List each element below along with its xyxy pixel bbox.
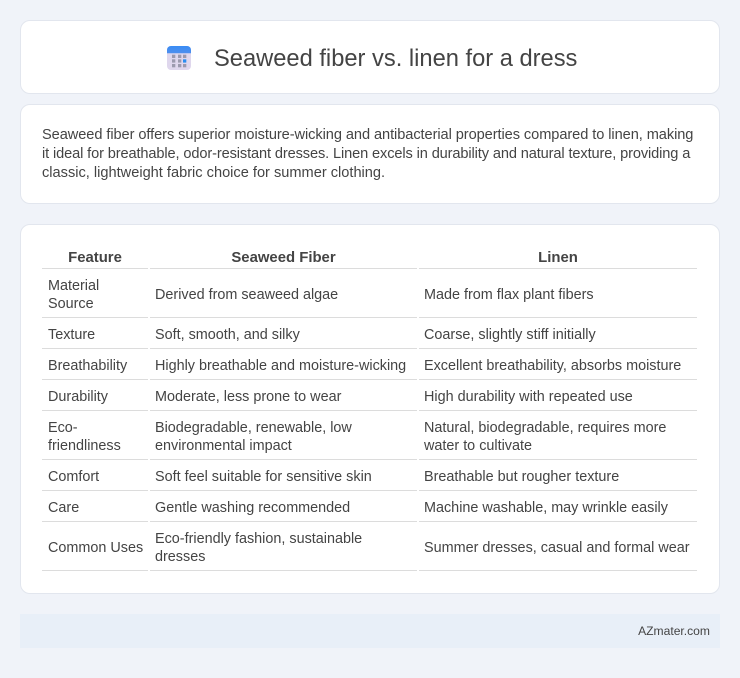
- row: eco-friendliness: environmental impact: [155, 438, 292, 454]
- header card: [20, 20, 720, 94]
- row: common uses: dresses: [155, 549, 205, 565]
- row: breathability: Highly breathable and moisture-wicking: [155, 358, 406, 374]
- row: common uses: Common Uses: [48, 540, 143, 556]
- row: breathability: Breathability: [48, 358, 127, 374]
- row: comfort: Comfort: [48, 469, 99, 485]
- row: comfort: [48, 469, 619, 485]
- row: texture: Coarse, slightly stiff initially: [424, 327, 596, 343]
- row: breathability: [48, 358, 681, 374]
- row: material source: Derived from seaweed algae: [155, 287, 338, 303]
- row: care: [48, 500, 668, 516]
- row: eco-friendliness: Natural, biodegradable, requires more: [424, 420, 666, 436]
- row: eco-friendliness: Biodegradable, renewable, low: [155, 420, 352, 436]
- row: eco-friendliness: Eco-: [48, 420, 78, 436]
- row: material source: [48, 278, 594, 312]
- icon: calendar: [167, 46, 191, 70]
- row: durability: Moderate, less prone to wear: [155, 389, 341, 405]
- row: care: Care: [48, 500, 79, 516]
- row: eco-friendliness: [48, 420, 666, 454]
- description text: classic, lightweight fabric choice for summer clothing.: [42, 165, 385, 181]
- row: eco-friendliness: friendliness: [48, 438, 121, 454]
- row: common uses: [48, 531, 690, 565]
- row: care: Gentle washing recommended: [155, 500, 350, 516]
- row: comfort: Soft feel suitable for sensitive skin: [155, 469, 372, 485]
- row: durability: Durability: [48, 389, 108, 405]
- title: Seaweed fiber vs. linen for a dress: [214, 46, 577, 72]
- comparison table card: [20, 224, 720, 594]
- description text: [42, 127, 693, 181]
- table header: Linen: [538, 250, 578, 266]
- table header: Seaweed Fiber: [231, 250, 336, 266]
- row: texture: Texture: [48, 327, 95, 343]
- description text: Seaweed fiber offers superior moisture-wicking and antibacterial properties compared to linen, making: [42, 127, 693, 143]
- row lines: [42, 268, 697, 571]
- row: common uses: Summer dresses, casual and formal wear: [424, 540, 690, 556]
- row: texture: Soft, smooth, and silky: [155, 327, 300, 343]
- row: care: Machine washable, may wrinkle easily: [424, 500, 668, 516]
- footer credit: AZmater.com: [638, 624, 710, 638]
- row: material source: Material: [48, 278, 99, 294]
- row: material source: Made from flax plant fibers: [424, 287, 594, 303]
- table header: [68, 250, 578, 266]
- row: texture: [48, 327, 596, 343]
- description text: it ideal for breathable, odor-resistant dresses. Linen excels in durability and natural texture, providing a: [42, 146, 690, 162]
- footer bar: [20, 614, 720, 648]
- row: material source: Source: [48, 296, 94, 312]
- row: eco-friendliness: water to cultivate: [424, 438, 532, 454]
- row: comfort: Breathable but rougher texture: [424, 469, 619, 485]
- row: common uses: Eco-friendly fashion, sustainable: [155, 531, 362, 547]
- row: durability: [48, 389, 633, 405]
- description card: [20, 104, 720, 204]
- table header: Feature: [68, 250, 122, 266]
- row: durability: High durability with repeated use: [424, 389, 633, 405]
- row: breathability: Excellent breathability, absorbs moisture: [424, 358, 681, 374]
